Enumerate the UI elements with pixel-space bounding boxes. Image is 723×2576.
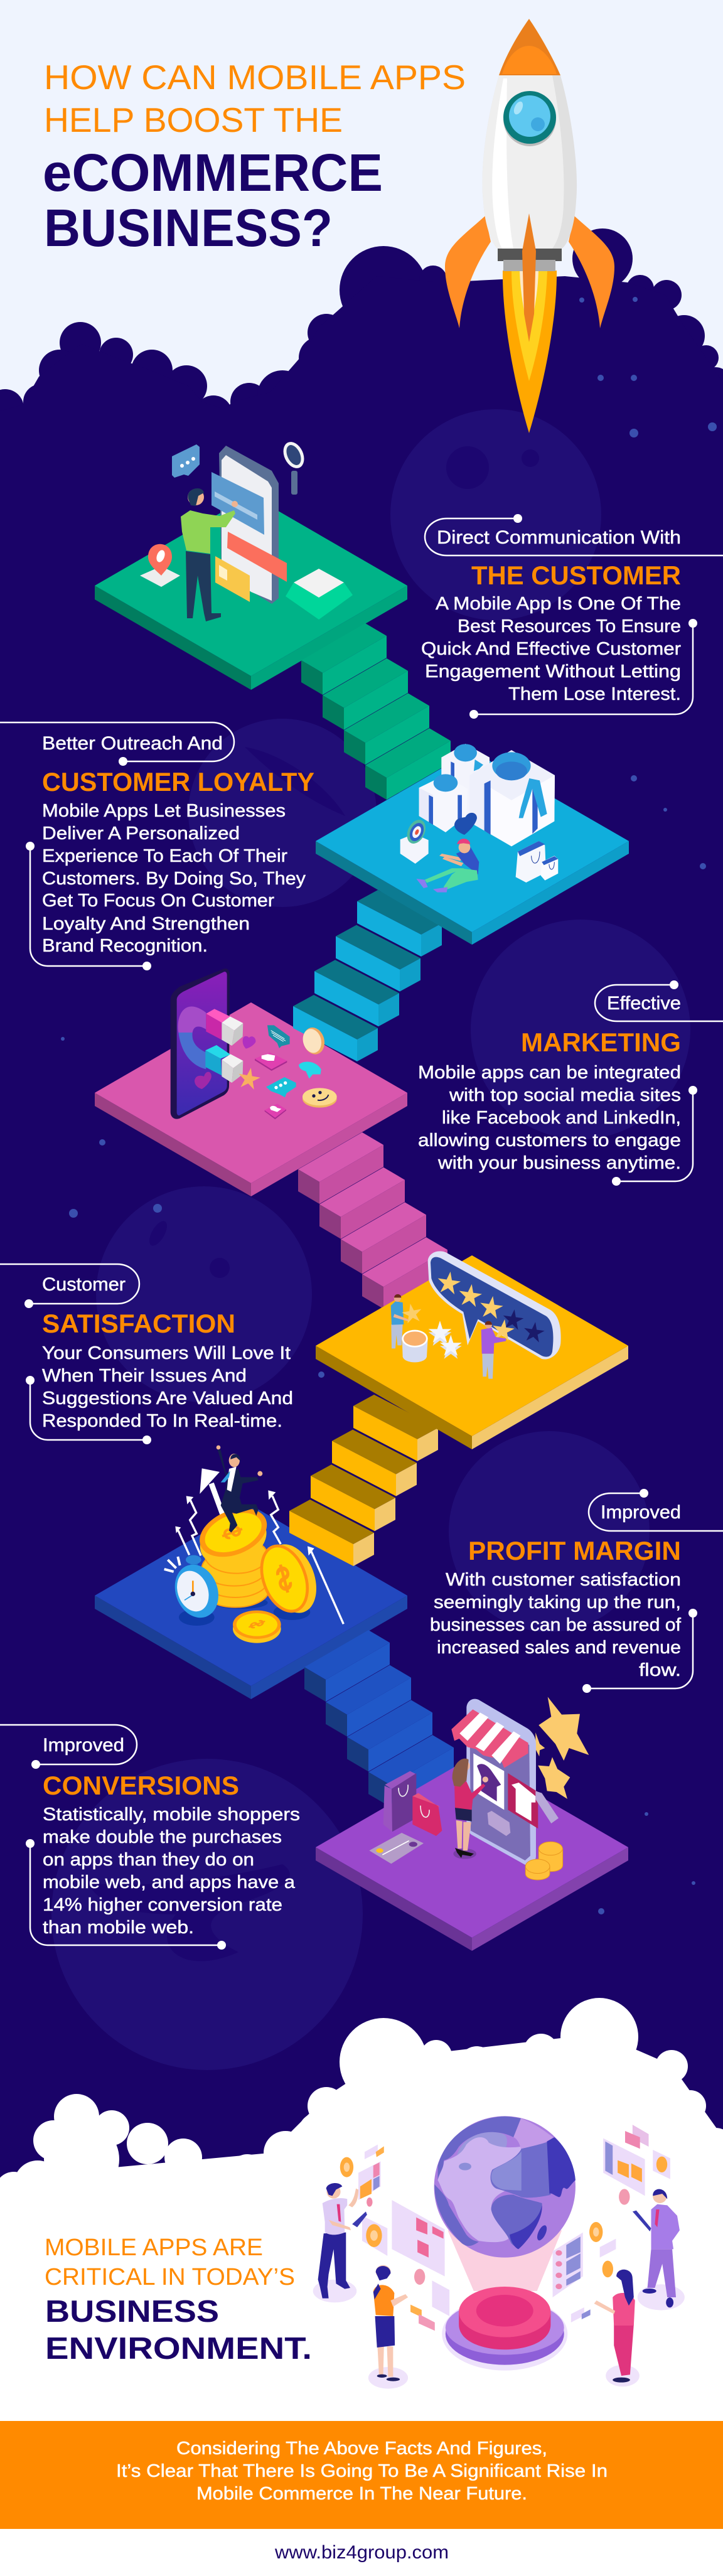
closing heading bold lines: BUSINESS	[45, 2295, 219, 2329]
woman right	[594, 2270, 640, 2386]
woman shopper	[453, 1759, 488, 1859]
conclusion text: Mobile Commerce In The Near Future.	[196, 2484, 527, 2504]
magnet	[205, 1009, 243, 1083]
callout 6: conversions	[0, 1725, 300, 1950]
callout body: seemingly taking up the run,	[434, 1592, 681, 1613]
callout connector	[0, 1725, 226, 1950]
callout body: A Mobile App Is One Of The	[436, 594, 681, 614]
callout body: Suggestions Are Valued And	[42, 1388, 293, 1409]
hologram beam	[447, 2230, 562, 2291]
stairs: yellow	[289, 1395, 438, 1566]
closing heading	[45, 2235, 312, 2366]
callout connector	[425, 514, 723, 719]
callout 2: customer loyalty	[0, 722, 314, 970]
callout body: like Facebook and LinkedIn,	[442, 1108, 681, 1128]
gold coins	[525, 1842, 563, 1880]
callout heading: PROFIT MARGIN	[468, 1536, 681, 1565]
flat coin	[233, 1611, 281, 1643]
illustration: man using phone app	[140, 439, 353, 621]
callout body: flow.	[639, 1660, 681, 1680]
callout body: mobile web, and apps have a	[43, 1872, 296, 1892]
callout body: Experience To Each Of Their	[42, 846, 287, 866]
callout label: Direct Communication With	[437, 527, 681, 548]
title bold lines	[43, 143, 383, 257]
stopwatch	[164, 1555, 225, 1624]
title bold lines: BUSINESS?	[44, 198, 333, 257]
callout connector	[595, 980, 723, 1186]
illustration: phone with magnet and social icons	[171, 969, 337, 1119]
man placing star	[481, 1321, 506, 1379]
callout connector	[0, 1264, 151, 1444]
app cards	[212, 472, 287, 602]
conclusion text: It’s Clear That There Is Going To Be A Significant Rise In	[116, 2461, 608, 2481]
hologram base	[442, 2287, 567, 2371]
floor shadows	[179, 1596, 310, 1626]
website url: www.biz4group.com	[274, 2542, 449, 2563]
clothing panels	[473, 1753, 559, 1836]
platform 6: purple	[316, 1757, 628, 1951]
icon: heart	[454, 813, 477, 835]
platform 1: green	[95, 495, 407, 690]
title bold lines: eCOMMERCE	[43, 143, 383, 202]
callout body: businesses can be assured of	[430, 1615, 682, 1635]
closing heading bold lines	[45, 2295, 312, 2366]
callout body: allowing customers to engage	[418, 1130, 681, 1151]
title light lines	[44, 58, 466, 139]
callout body: Statistically, mobile shoppers	[43, 1805, 300, 1825]
man holding star	[391, 1294, 424, 1348]
callout label: Customer	[42, 1274, 126, 1295]
shopping bags	[383, 1771, 442, 1836]
rocket fins	[445, 216, 614, 328]
callout body	[430, 1570, 682, 1680]
globe	[434, 2116, 576, 2258]
stars	[535, 1697, 589, 1799]
tilted coin	[254, 1537, 325, 1620]
callout body: Customers. By Doing So, They	[42, 869, 306, 889]
callout body: 14% higher conversion rate	[43, 1895, 282, 1915]
phone	[171, 969, 230, 1119]
callout 4: customer satisfaction	[0, 1264, 293, 1444]
callout body	[42, 801, 306, 956]
callout 3: effective marketing	[418, 980, 723, 1186]
gift boxes	[419, 744, 555, 846]
callout body: than mobile web.	[43, 1918, 194, 1938]
callout heading: THE CUSTOMER	[471, 561, 681, 590]
callout connector	[0, 722, 234, 970]
credit card	[369, 1833, 424, 1864]
callout heading: MARKETING	[521, 1028, 681, 1057]
icon: open box	[286, 569, 353, 620]
icon: chat bubble	[172, 444, 200, 478]
awning	[451, 1709, 528, 1768]
growth arrows	[178, 1483, 343, 1624]
title light lines: HELP BOOST THE	[44, 100, 343, 139]
review bubble	[428, 1251, 561, 1360]
callout body: Mobile Apps Let Businesses	[42, 801, 286, 821]
icon: magnifier	[279, 439, 308, 495]
callout body: Deliver A Personalized	[42, 824, 240, 844]
man	[181, 488, 238, 621]
callout heading: CONVERSIONS	[43, 1771, 239, 1800]
callout body	[42, 1343, 293, 1431]
callout label: Effective	[607, 993, 681, 1014]
closing heading light lines: CRITICAL IN TODAY’S	[45, 2264, 295, 2290]
platform 2: cyan	[316, 751, 629, 945]
dark cloud band	[0, 228, 723, 2197]
flame	[503, 271, 557, 433]
rocket	[445, 19, 614, 433]
callout body: Engagement Without Letting	[425, 662, 681, 682]
callout heading: CUSTOMER LOYALTY	[42, 767, 314, 797]
callout body	[421, 594, 681, 704]
coin stack	[202, 1538, 269, 1607]
callout label: Improved	[601, 1502, 681, 1523]
callout body: with your business anytime.	[437, 1153, 681, 1173]
paint bucket	[402, 1330, 428, 1362]
social icons	[237, 1025, 337, 1119]
stairs: royal blue	[304, 1630, 454, 1806]
conclusion text: Considering The Above Facts And Figures,	[176, 2439, 547, 2459]
callout body: Brand Recognition.	[42, 936, 208, 956]
callout body: When Their Issues And	[42, 1366, 247, 1386]
callout body: With customer satisfaction	[446, 1570, 681, 1590]
illustration: star review bubble with people	[391, 1251, 561, 1379]
arrow heads	[175, 1468, 314, 1555]
phone	[219, 446, 279, 604]
callout body: Responded To In Real-time.	[42, 1411, 282, 1431]
light sky background	[0, 0, 723, 439]
platform 4: yellow	[316, 1255, 628, 1449]
woman left	[368, 2265, 408, 2389]
illustration: coins, clock and businessman	[164, 1446, 343, 1643]
title	[43, 58, 466, 257]
stairs: pink	[298, 1132, 447, 1309]
white cloud band	[0, 1998, 723, 2576]
target on box	[400, 817, 429, 864]
top coin	[193, 1499, 274, 1575]
illustration: mobile storefront	[369, 1697, 589, 1880]
businessman	[217, 1446, 262, 1533]
callout body: Your Consumers Will Love It	[42, 1343, 291, 1363]
callout body: with top social media sites	[449, 1085, 681, 1105]
title light lines: HOW CAN MOBILE APPS	[44, 58, 466, 97]
callout body: Quick And Effective Customer	[421, 639, 681, 659]
callout connector	[582, 1489, 723, 1693]
callout body: Mobile apps can be integrated	[418, 1063, 681, 1083]
man right	[633, 2189, 685, 2310]
rocket window	[503, 91, 556, 146]
background planets	[51, 297, 717, 2070]
callout label: Better Outreach And	[42, 733, 223, 754]
stairs: cyan	[293, 890, 442, 1061]
rocket engine	[498, 249, 562, 271]
star stack	[429, 1321, 462, 1359]
person with phone	[416, 839, 479, 893]
closing heading light lines: MOBILE APPS ARE	[45, 2235, 263, 2261]
icon: location pin	[140, 544, 180, 587]
callout body	[418, 1063, 681, 1173]
callout body: Get To Focus On Customer	[42, 891, 274, 911]
closing heading light lines	[45, 2235, 295, 2290]
rocket nose	[499, 19, 560, 75]
callout body: Best Resources To Ensure	[458, 616, 681, 636]
callout label: Improved	[43, 1735, 124, 1756]
rating stars	[436, 1270, 545, 1343]
callout heading: SATISFACTION	[42, 1309, 235, 1338]
callout body: on apps than they do on	[43, 1850, 254, 1870]
rocket body	[482, 75, 577, 249]
illustration: gift boxes and person	[400, 744, 558, 893]
callout body	[43, 1805, 300, 1938]
gift bows	[434, 744, 547, 818]
shopping bags	[516, 841, 558, 883]
callout body: Loyalty And Strengthen	[42, 914, 250, 934]
platform 5: royal blue	[95, 1505, 407, 1699]
platform 3: pink	[95, 1002, 407, 1196]
rocket centre fin	[522, 213, 536, 342]
illustration: globe hologram with team	[313, 2116, 685, 2389]
data panels	[340, 2125, 670, 2331]
callout body: make double the purchases	[43, 1827, 282, 1847]
callout body: Them Lose Interest.	[508, 684, 681, 704]
store phone	[466, 1699, 536, 1865]
conclusion banner	[0, 2421, 723, 2529]
callout 1: direct communication	[421, 514, 723, 719]
conclusion text	[116, 2439, 608, 2504]
callout 5: profit margin	[430, 1489, 723, 1693]
callout body: increased sales and revenue	[437, 1638, 681, 1658]
closing heading bold lines: ENVIRONMENT.	[45, 2332, 312, 2366]
man left	[313, 2183, 367, 2302]
stairs: green	[301, 623, 451, 800]
